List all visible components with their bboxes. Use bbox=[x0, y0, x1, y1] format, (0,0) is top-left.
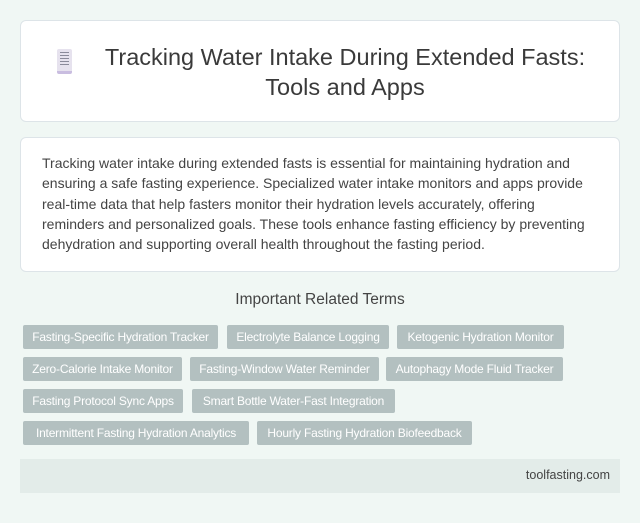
title: Tools and Apps bbox=[265, 74, 425, 100]
description panel bbox=[20, 137, 620, 272]
tags: Hourly Fasting Hydration Biofeedback bbox=[267, 426, 462, 440]
tags: Fasting-Specific Hydration Tracker bbox=[32, 330, 209, 344]
title panel bbox=[20, 20, 620, 122]
description text: Tracking water intake during extended fasts is essential for maintaining hydration and ensuring a safe fasting experience. Specialized water intake monitors and apps provide real-time data that help fasters monitor their hydration levels accurately, offering reminders and personalized goals. These tools enhance fasting efficiency by preventing dehydration and supporting overall health throughout the fasting period. bbox=[42, 155, 585, 252]
tags: Fasting Protocol Sync Apps bbox=[32, 394, 174, 408]
title: Tracking Water Intake During Extended Fasts: bbox=[105, 44, 585, 70]
footer text: toolfasting.com bbox=[526, 468, 610, 482]
heading: related terms: Important Related Terms bbox=[235, 291, 405, 308]
footer bbox=[20, 459, 620, 493]
tags: Ketogenic Hydration Monitor bbox=[407, 330, 554, 344]
tags: Smart Bottle Water-Fast Integration bbox=[203, 394, 384, 408]
tags: Zero-Calorie Intake Monitor bbox=[32, 362, 173, 376]
tags: Electrolyte Balance Logging bbox=[236, 330, 380, 344]
tags: Intermittent Fasting Hydration Analytics bbox=[36, 426, 236, 440]
tags: Autophagy Mode Fluid Tracker bbox=[396, 362, 553, 376]
icon: document bbox=[57, 49, 72, 74]
title bbox=[105, 44, 585, 100]
tags: Fasting-Window Water Reminder bbox=[199, 362, 370, 376]
